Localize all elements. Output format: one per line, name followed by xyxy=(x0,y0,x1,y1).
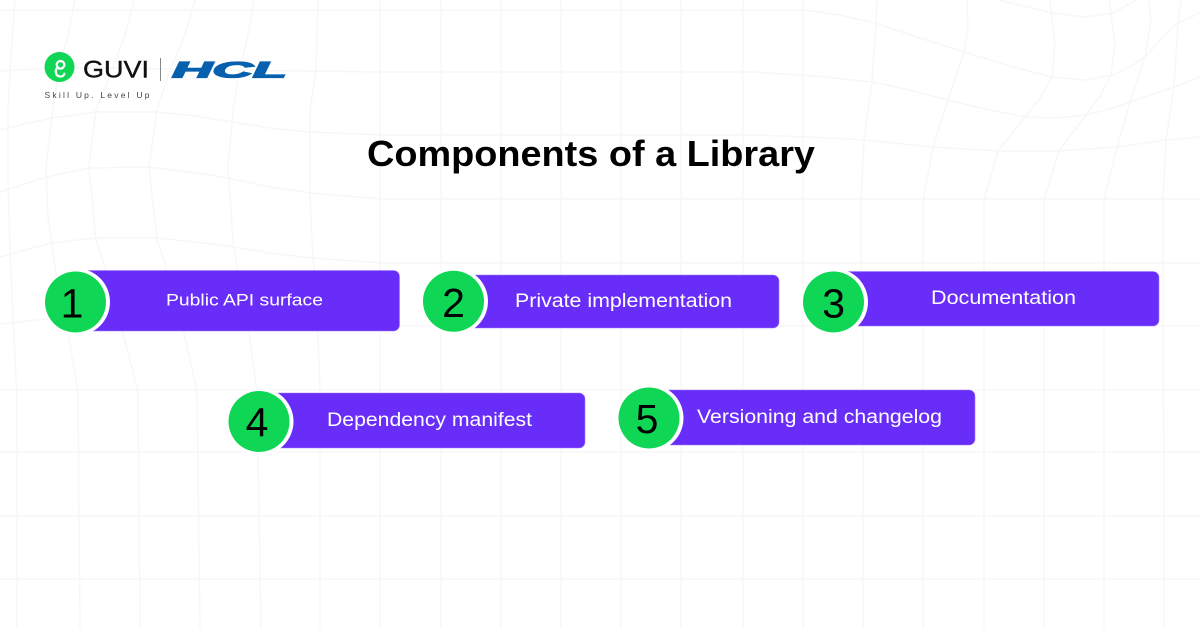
number badge 2 xyxy=(421,268,488,335)
label 5: Versioning and changelog xyxy=(697,407,942,428)
tagline: Skill Up. Level Up xyxy=(44,90,150,100)
number badge 5: 5 xyxy=(636,396,658,442)
number badge 1: 1 xyxy=(61,280,83,326)
number badge 2: 2 xyxy=(442,280,465,326)
number badge 1 xyxy=(43,268,110,336)
bar 3 xyxy=(830,272,1159,326)
number badge 4: 4 xyxy=(246,400,268,446)
number badge 4 xyxy=(226,388,294,455)
item 5: Versioning and changelog xyxy=(616,384,975,452)
GUVI wordmark: GUVI xyxy=(83,56,149,84)
logo: GUVI and HCL xyxy=(44,52,287,100)
icon: GUVI green circle xyxy=(44,52,74,82)
number badge 3 xyxy=(801,268,868,336)
HCL wordmark: HCL xyxy=(172,58,287,82)
bar 1 xyxy=(70,270,400,331)
bar 2 xyxy=(450,275,779,328)
title: Components of a Library xyxy=(367,133,816,174)
number badge 3: 3 xyxy=(822,280,845,326)
logo divider xyxy=(160,58,161,81)
label 3: Documentation xyxy=(931,288,1076,309)
label 4: Dependency manifest xyxy=(327,410,533,431)
item 2: Private implementation xyxy=(421,268,779,335)
item 1: Public API surface xyxy=(43,268,400,336)
item 3: Documentation xyxy=(801,268,1159,336)
item 4: Dependency manifest xyxy=(226,388,585,455)
bar 4 xyxy=(255,393,585,448)
label 1: Public API surface xyxy=(166,290,323,310)
label 2: Private implementation xyxy=(515,291,732,312)
bar 5 xyxy=(645,390,975,445)
number badge 5 xyxy=(616,384,684,452)
